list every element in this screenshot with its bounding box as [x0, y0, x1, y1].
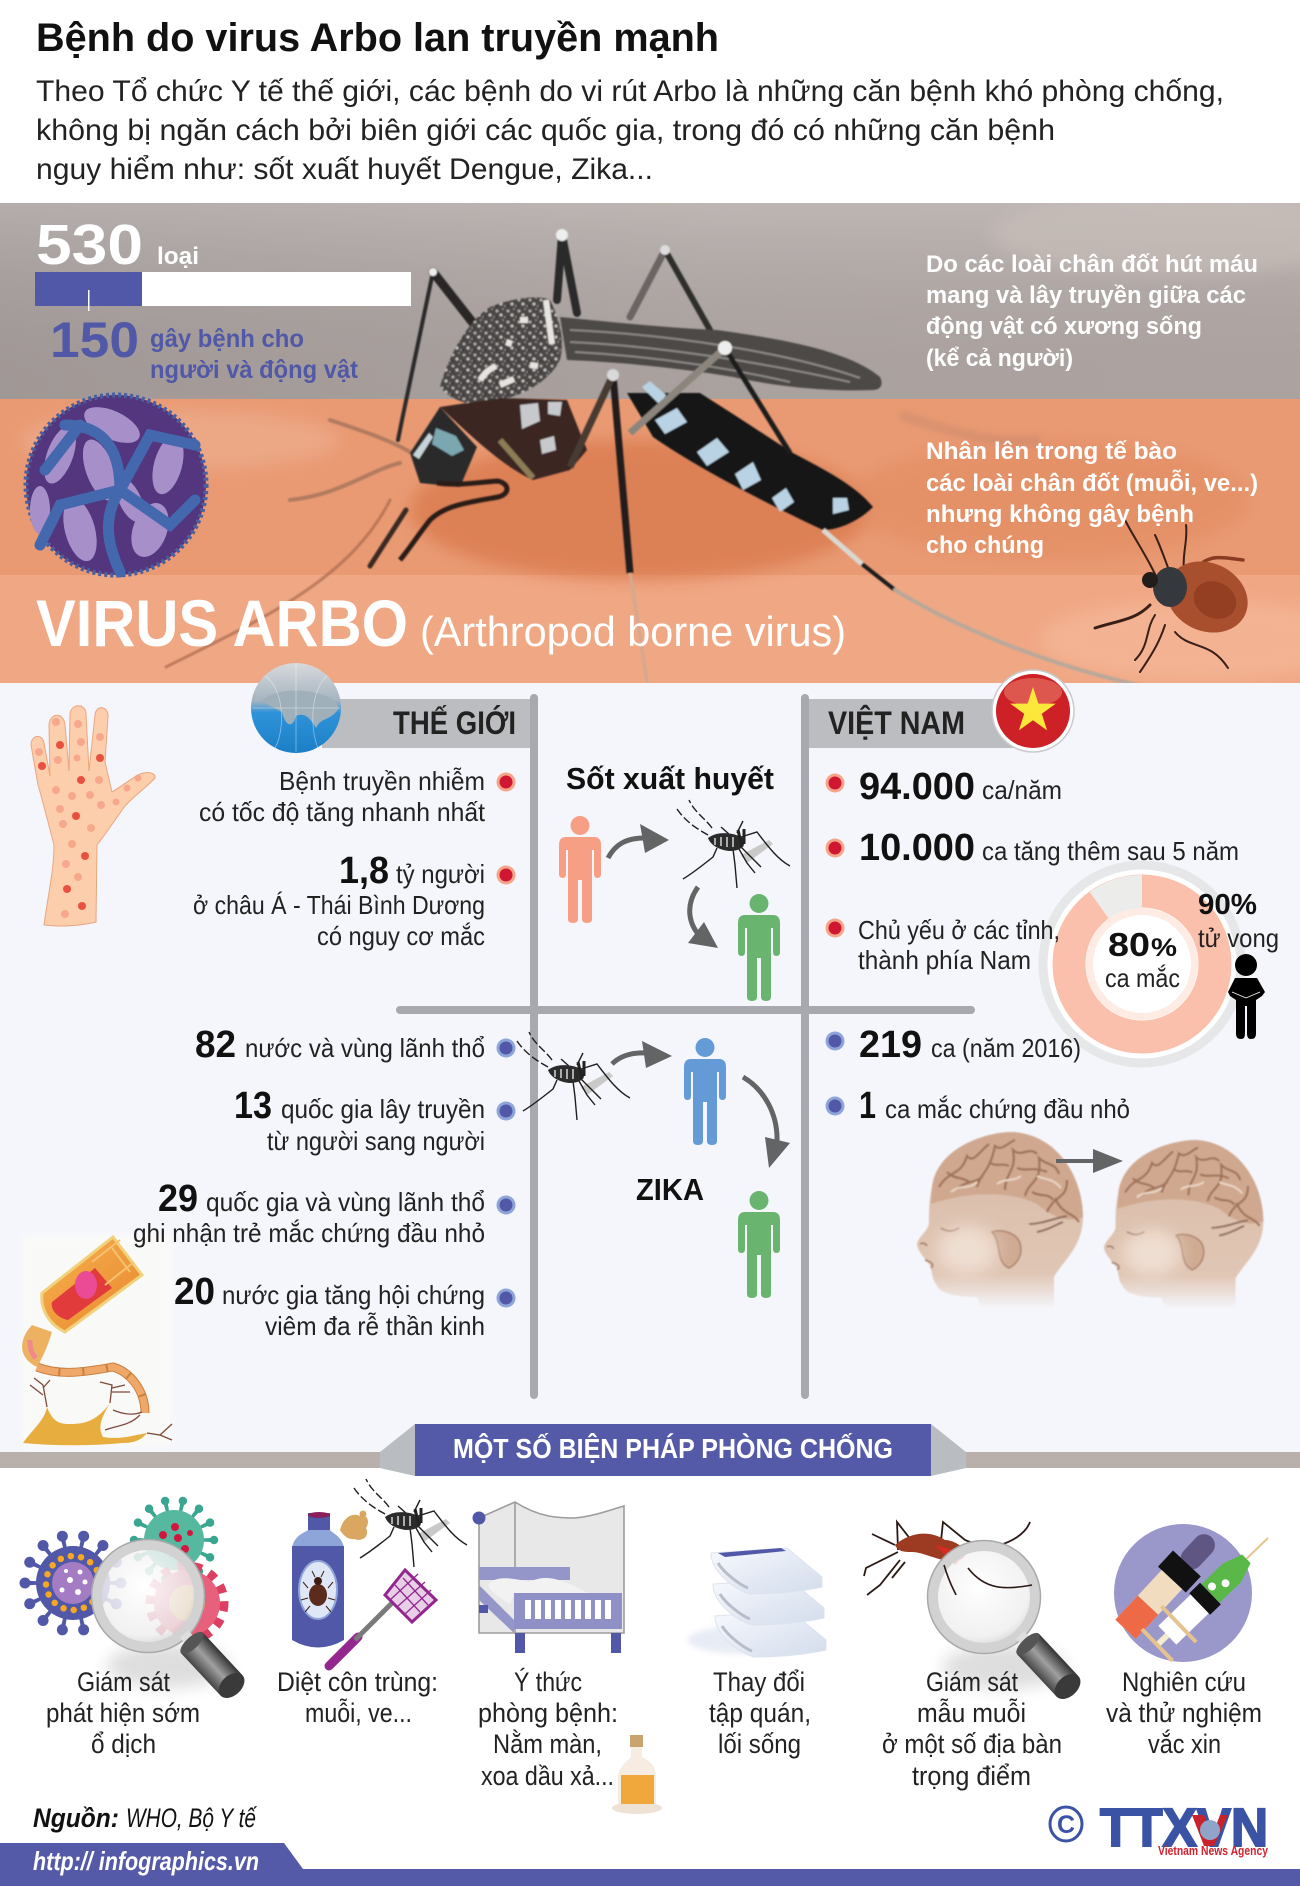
label [709, 1667, 811, 1759]
text: 1.8 billion [193, 850, 485, 951]
stat: 530 species: loại [157, 243, 199, 270]
donut chart: 80 percent of cases, 90 percent of deaths: ca mắc [1105, 963, 1180, 993]
icon: blue person [684, 1038, 726, 1145]
text: southern provinces: thành phía Nam [858, 945, 1031, 975]
stat: 150 pathogenic [53, 322, 358, 383]
heading: virus arbo: VIRUS ARBO [36, 586, 408, 660]
text: replication: nhưng không gây bệnh [926, 501, 1194, 528]
text: 10,000 cases [859, 827, 1239, 869]
stat: 530 species [38, 224, 198, 268]
header background [0, 0, 1300, 203]
content background [0, 683, 1300, 1452]
text: 29 countries: quốc gia và vùng lãnh thổ [206, 1187, 485, 1217]
label: Diệt côn trùng: [277, 1667, 438, 1697]
text: 20 countries: nước gia tăng hội chứng [222, 1280, 485, 1310]
label: phòng bệnh: [478, 1698, 618, 1728]
heading: dengue: Sốt xuất huyết [566, 761, 774, 796]
bullet [826, 838, 844, 858]
label: ổ dịch [91, 1729, 156, 1759]
text: transmission: Do các loài chân đốt hút máu [926, 251, 1258, 278]
text: 1.8 billion: tỷ người [396, 859, 485, 889]
label [46, 1667, 200, 1759]
icon: globe [251, 663, 341, 753]
label: Giám sát [77, 1667, 170, 1697]
bullet [826, 1096, 844, 1116]
text: 13 countries: 13 [234, 1085, 272, 1127]
footer bar [0, 1843, 1300, 1886]
label: Ý thức [514, 1667, 582, 1697]
swatter [329, 1570, 436, 1666]
mosquito photo [166, 229, 1161, 700]
text: 94,000 cases [859, 766, 1062, 808]
text: 219 cases: ca (năm 2016) [931, 1033, 1081, 1063]
icon: stacked towels [688, 1548, 826, 1657]
logo: TTXVN: TTXVN [1100, 1798, 1268, 1858]
band [0, 1452, 1300, 1468]
footer bar: http:// infographics.vn [33, 1846, 259, 1876]
text: 13 countries: quốc gia lây truyền [281, 1094, 485, 1124]
banner: prevention measures [380, 1424, 966, 1476]
arrow: mosquito to person [612, 1041, 672, 1068]
arrow: person to person [743, 1077, 790, 1168]
icon: microcephaly baby head [1104, 1140, 1263, 1309]
label: phát hiện sớm [46, 1698, 200, 1728]
stat: 150 pathogenic: gây bệnh cho [150, 325, 304, 353]
prevention section background [0, 1468, 1300, 1886]
bullet [496, 1196, 516, 1214]
label: muỗi, ve... [305, 1697, 412, 1728]
text: 90 percent deaths: 90% [1198, 889, 1257, 921]
text: replication: các loài chân đốt (muỗi, ve...) [926, 469, 1258, 497]
text: 20 countries [174, 1271, 485, 1341]
icon: bed with mosquito net [472, 1502, 624, 1653]
text: 10,000 cases: ca tăng thêm sau 5 năm [982, 836, 1239, 866]
intro text: Theo Tổ chức Y tế thế giới, các bệnh do vi rút Arbo là những căn bệnh khó phòng chống, [36, 75, 1224, 108]
title: Bệnh do virus Arbo lan truyền mạnh [36, 16, 719, 60]
text: 219 cases: 219 [859, 1024, 922, 1066]
label: Giám sát [926, 1667, 1018, 1697]
panel: the world heading [251, 663, 530, 753]
virus particle [26, 395, 206, 575]
text: 29 countries: 29 [158, 1178, 198, 1220]
quadrant dividers [396, 694, 975, 1399]
legs foreground [613, 375, 630, 573]
bullet [496, 1288, 516, 1308]
intro text: không bị ngăn cách bởi biên giới các quốc gia, trong đó có những căn bệnh [36, 114, 1055, 147]
icon: hand with rash [31, 706, 155, 926]
spray can [292, 1512, 344, 1648]
label [882, 1667, 1062, 1791]
mouth loop [400, 481, 507, 560]
arrow: head to head [1056, 1149, 1123, 1173]
label: lối sống [718, 1729, 801, 1759]
text: transmission: động vật có xương sống [926, 313, 1202, 340]
text: transmission: mang và lây truyền giữa các [926, 282, 1246, 309]
text: fastest growing [199, 766, 486, 827]
donut chart: 80 percent of cases, 90 percent of deaths: 80 [1108, 926, 1150, 963]
source [33, 1803, 258, 1833]
heading: virus arbo [36, 600, 844, 654]
label [478, 1667, 618, 1791]
label: vắc xin [1148, 1728, 1221, 1759]
heading: zika: ZIKA [636, 1172, 704, 1207]
text: transmission: (kể cả người) [926, 345, 1073, 372]
icon: black person [1228, 954, 1265, 1039]
intro text: nguy hiểm như: sốt xuất huyết Dengue, Zika... [36, 153, 653, 186]
text: fastest growing: Bệnh truyền nhiễm [279, 766, 485, 796]
bullet [826, 1032, 844, 1050]
icon: orange person [559, 816, 601, 923]
label [1106, 1667, 1262, 1759]
text: replication: Nhân lên trong tế bào [926, 438, 1177, 465]
bar: 150 of 530 [35, 272, 411, 311]
label: xoa dầu xả... [481, 1761, 614, 1791]
stat: 150 pathogenic: người và động vật [150, 356, 359, 384]
label [277, 1667, 438, 1728]
label: trọng điểm [912, 1761, 1031, 1791]
panel: vietnam heading: VIỆT NAM [828, 705, 965, 741]
icon: green person [738, 1191, 780, 1298]
icon: insect killing tools [292, 1479, 467, 1666]
text: 1 microcephaly case: 1 [859, 1085, 876, 1127]
mosquito [354, 1479, 467, 1567]
icon: normal baby head [917, 1132, 1083, 1309]
stat: 150 pathogenic: 150 [50, 312, 139, 368]
icon: neuron [22, 1235, 172, 1447]
banner: prevention measures: MỘT SỐ BIỆN PHÁP PHÒNG CHỐNG [453, 1432, 893, 1464]
label: Thay đổi [713, 1667, 805, 1697]
panel: mosquito photo hero [0, 195, 1300, 700]
bullet [826, 918, 844, 938]
head [410, 407, 477, 487]
donut chart: 80 percent of cases, 90 percent of deaths: % [1151, 934, 1177, 962]
text: 20 countries: viêm đa rễ thần kinh [265, 1311, 485, 1341]
wing [560, 317, 882, 390]
arrow: mosquito to person [688, 887, 718, 948]
label: Nghiên cứu [1122, 1667, 1246, 1697]
text: 10,000 cases: 10.000 [859, 827, 975, 869]
bullet [496, 772, 516, 792]
text: fastest growing: có tốc độ tăng nhanh nhất [199, 797, 486, 827]
text: 1 microcephaly case: ca mắc chứng đầu nhỏ [885, 1094, 1130, 1124]
text: southern provinces: Chủ yếu ở các tỉnh, [858, 915, 1060, 945]
text: 1.8 billion: ở châu Á - Thái Bình Dương [193, 890, 485, 920]
bullet [496, 866, 516, 884]
arrow: person to mosquito [608, 824, 669, 858]
spray cloud [340, 1515, 368, 1540]
icon: citronella oil bottle [612, 1735, 662, 1814]
panel: the world heading: THẾ GIỚI [393, 705, 516, 741]
text: 94,000 cases: 94.000 [859, 766, 975, 808]
abdomen [627, 393, 873, 530]
text: 20 countries: 20 [174, 1271, 215, 1313]
panel: vietnam heading [809, 670, 1074, 752]
text: transmission [926, 251, 1258, 372]
label: tập quán, [709, 1698, 811, 1728]
intro text [36, 75, 1224, 186]
text: 29 countries: ghi nhận trẻ mắc chứng đầu nhỏ [133, 1218, 485, 1248]
text: 1 microcephaly case [859, 1085, 1130, 1127]
icon: green person [738, 894, 780, 1001]
text: southern provinces [858, 915, 1060, 975]
copyright mark: C [1057, 1811, 1075, 1839]
text: 1.8 billion: có nguy cơ mắc [317, 921, 485, 951]
text: 29 countries [133, 1178, 485, 1248]
text: 13 countries: từ người sang người [267, 1126, 485, 1156]
heading: virus arbo: (Arthropod borne virus) [420, 608, 846, 655]
label: mẫu muỗi [917, 1697, 1026, 1728]
icon: surveillance of viruses [25, 1500, 249, 1703]
bullet [496, 1038, 516, 1058]
label: ở một số địa bàn [882, 1729, 1062, 1759]
copyright mark [1050, 1807, 1082, 1841]
donut chart: 80 percent of cases, 90 percent of deaths [1043, 865, 1241, 1063]
icon: mosquito sample under magnifier [864, 1522, 1085, 1704]
text: 219 cases [859, 1024, 1081, 1066]
icon: vietnam flag [992, 670, 1074, 752]
text: 90 percent deaths [1198, 889, 1279, 953]
text: replication: cho chúng [926, 532, 1044, 559]
text: 1.8 billion: 1,8 [339, 850, 389, 892]
text: 82 countries [195, 1024, 485, 1066]
text: 13 countries [234, 1085, 485, 1156]
icon: mosquito [677, 800, 790, 888]
tick [1095, 520, 1259, 672]
icon: vaccine research [1112, 1520, 1285, 1664]
text: 82 countries: nước và vùng lãnh thổ [245, 1033, 485, 1063]
text: replication [926, 438, 1258, 559]
text: 94,000 cases: ca/năm [982, 775, 1062, 805]
label: và thử nghiệm [1106, 1698, 1262, 1728]
logo: TTXVN: Vietnam News Agency [1158, 1843, 1269, 1858]
text: 90 percent deaths: tử vong [1198, 923, 1279, 953]
icon: zika mosquito [517, 1032, 630, 1120]
stat: 530 species: 530 [36, 213, 143, 277]
bullet [826, 774, 844, 792]
thorax [440, 297, 562, 404]
lower thorax [440, 398, 587, 480]
bullet [496, 1102, 516, 1120]
label: Nằm màn, [493, 1728, 602, 1759]
source: Nguồn: [33, 1803, 119, 1833]
text: 82 countries: 82 [195, 1024, 236, 1066]
source: WHO, Bộ Y tế [126, 1803, 258, 1833]
